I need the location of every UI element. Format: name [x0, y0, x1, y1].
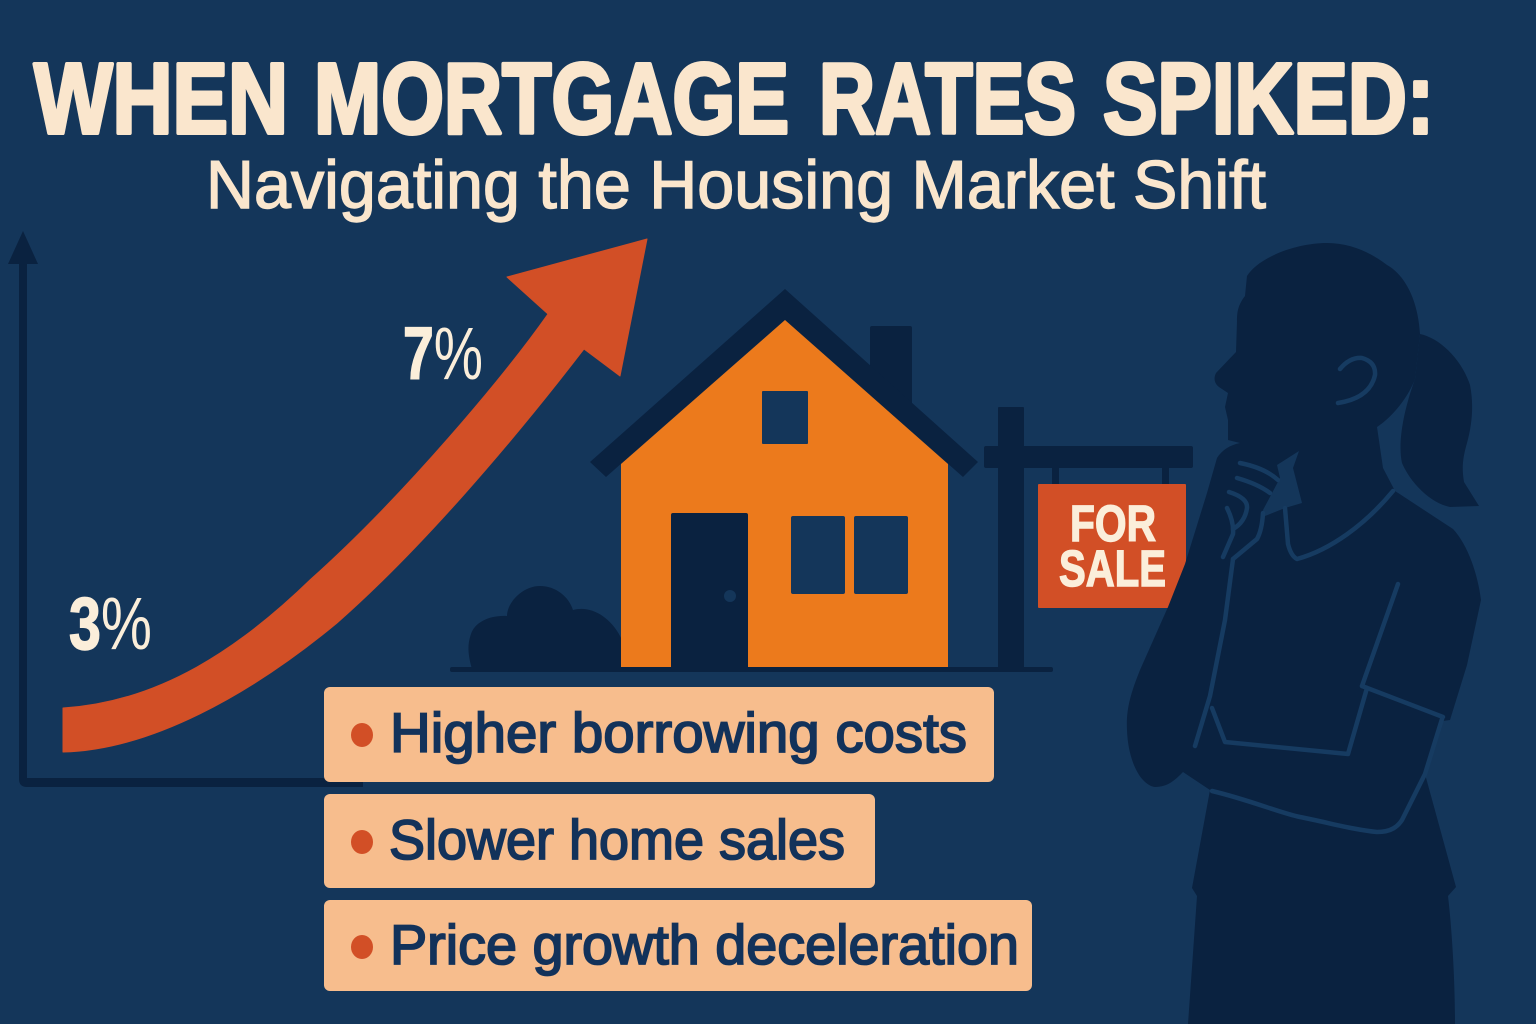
for sale sign: FOR	[1070, 495, 1156, 552]
title	[34, 43, 1434, 155]
panel: price growth deceleration: Price growth deceleration	[390, 913, 1019, 976]
subtitle: Navigating the Housing Market Shift	[206, 147, 1266, 223]
title: MORTGAGE	[314, 43, 789, 155]
panel: higher borrowing costs: Higher borrowing costs	[390, 701, 967, 764]
title: WHEN	[34, 43, 288, 155]
panel: slower home sales	[324, 794, 875, 888]
rising rate arrow	[63, 239, 647, 752]
chart axes	[8, 231, 363, 787]
label: 7%: 7%	[403, 312, 483, 395]
title: SPIKED:	[1103, 43, 1434, 155]
title: RATES	[819, 43, 1076, 155]
icon: house	[590, 289, 978, 670]
silhouette: thinking woman	[1127, 243, 1481, 1024]
panel: higher borrowing costs	[324, 687, 994, 782]
for sale sign: SALE	[1059, 540, 1166, 597]
icon: bush	[468, 586, 622, 669]
panel: slower home sales: Slower home sales	[389, 808, 845, 871]
label: 3%: 3%	[69, 582, 152, 665]
panel: price growth deceleration	[324, 900, 1032, 991]
for sale sign	[984, 407, 1193, 670]
ground line	[450, 667, 1053, 672]
